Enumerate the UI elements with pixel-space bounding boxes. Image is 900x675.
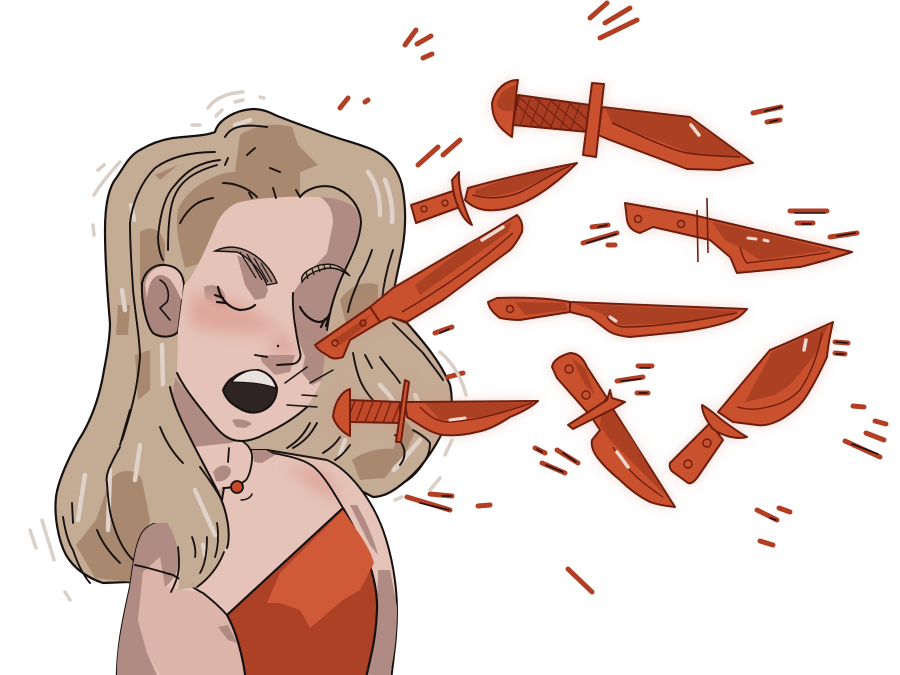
hair shadow patches [76, 125, 415, 582]
hair motion lines [30, 92, 466, 600]
hair highlights [78, 120, 425, 555]
shoulder line [135, 452, 343, 615]
face shadow [293, 197, 360, 385]
knife 8: wide knife [670, 322, 833, 483]
nose [255, 293, 301, 365]
knife 1: bowie knife [492, 80, 753, 170]
face [177, 186, 361, 441]
motion marks [340, 3, 886, 592]
hair strands [63, 126, 443, 583]
cheek lines [285, 367, 333, 407]
hair back [55, 109, 452, 590]
knife 2: small knife [411, 163, 577, 225]
arm shadow [117, 522, 179, 675]
skin [117, 450, 397, 675]
knife 5: chef knife [625, 198, 852, 273]
open mouth [223, 370, 277, 413]
face outline [177, 186, 361, 441]
blush [190, 294, 280, 333]
closed eyes [215, 287, 330, 327]
knife 6: paring knife [488, 298, 747, 337]
shoulder blush [285, 465, 345, 505]
ear [142, 265, 184, 337]
eyebrows [215, 247, 277, 285]
body and dress [117, 450, 397, 675]
neck [172, 378, 275, 500]
knife 3: diagonal knife at face [315, 215, 522, 358]
necklace pendant [231, 481, 243, 493]
knife 4: knife near mouth [333, 380, 538, 442]
knife 7: hunting knife [552, 353, 675, 507]
front hair lock [148, 380, 229, 592]
dress [227, 508, 377, 675]
